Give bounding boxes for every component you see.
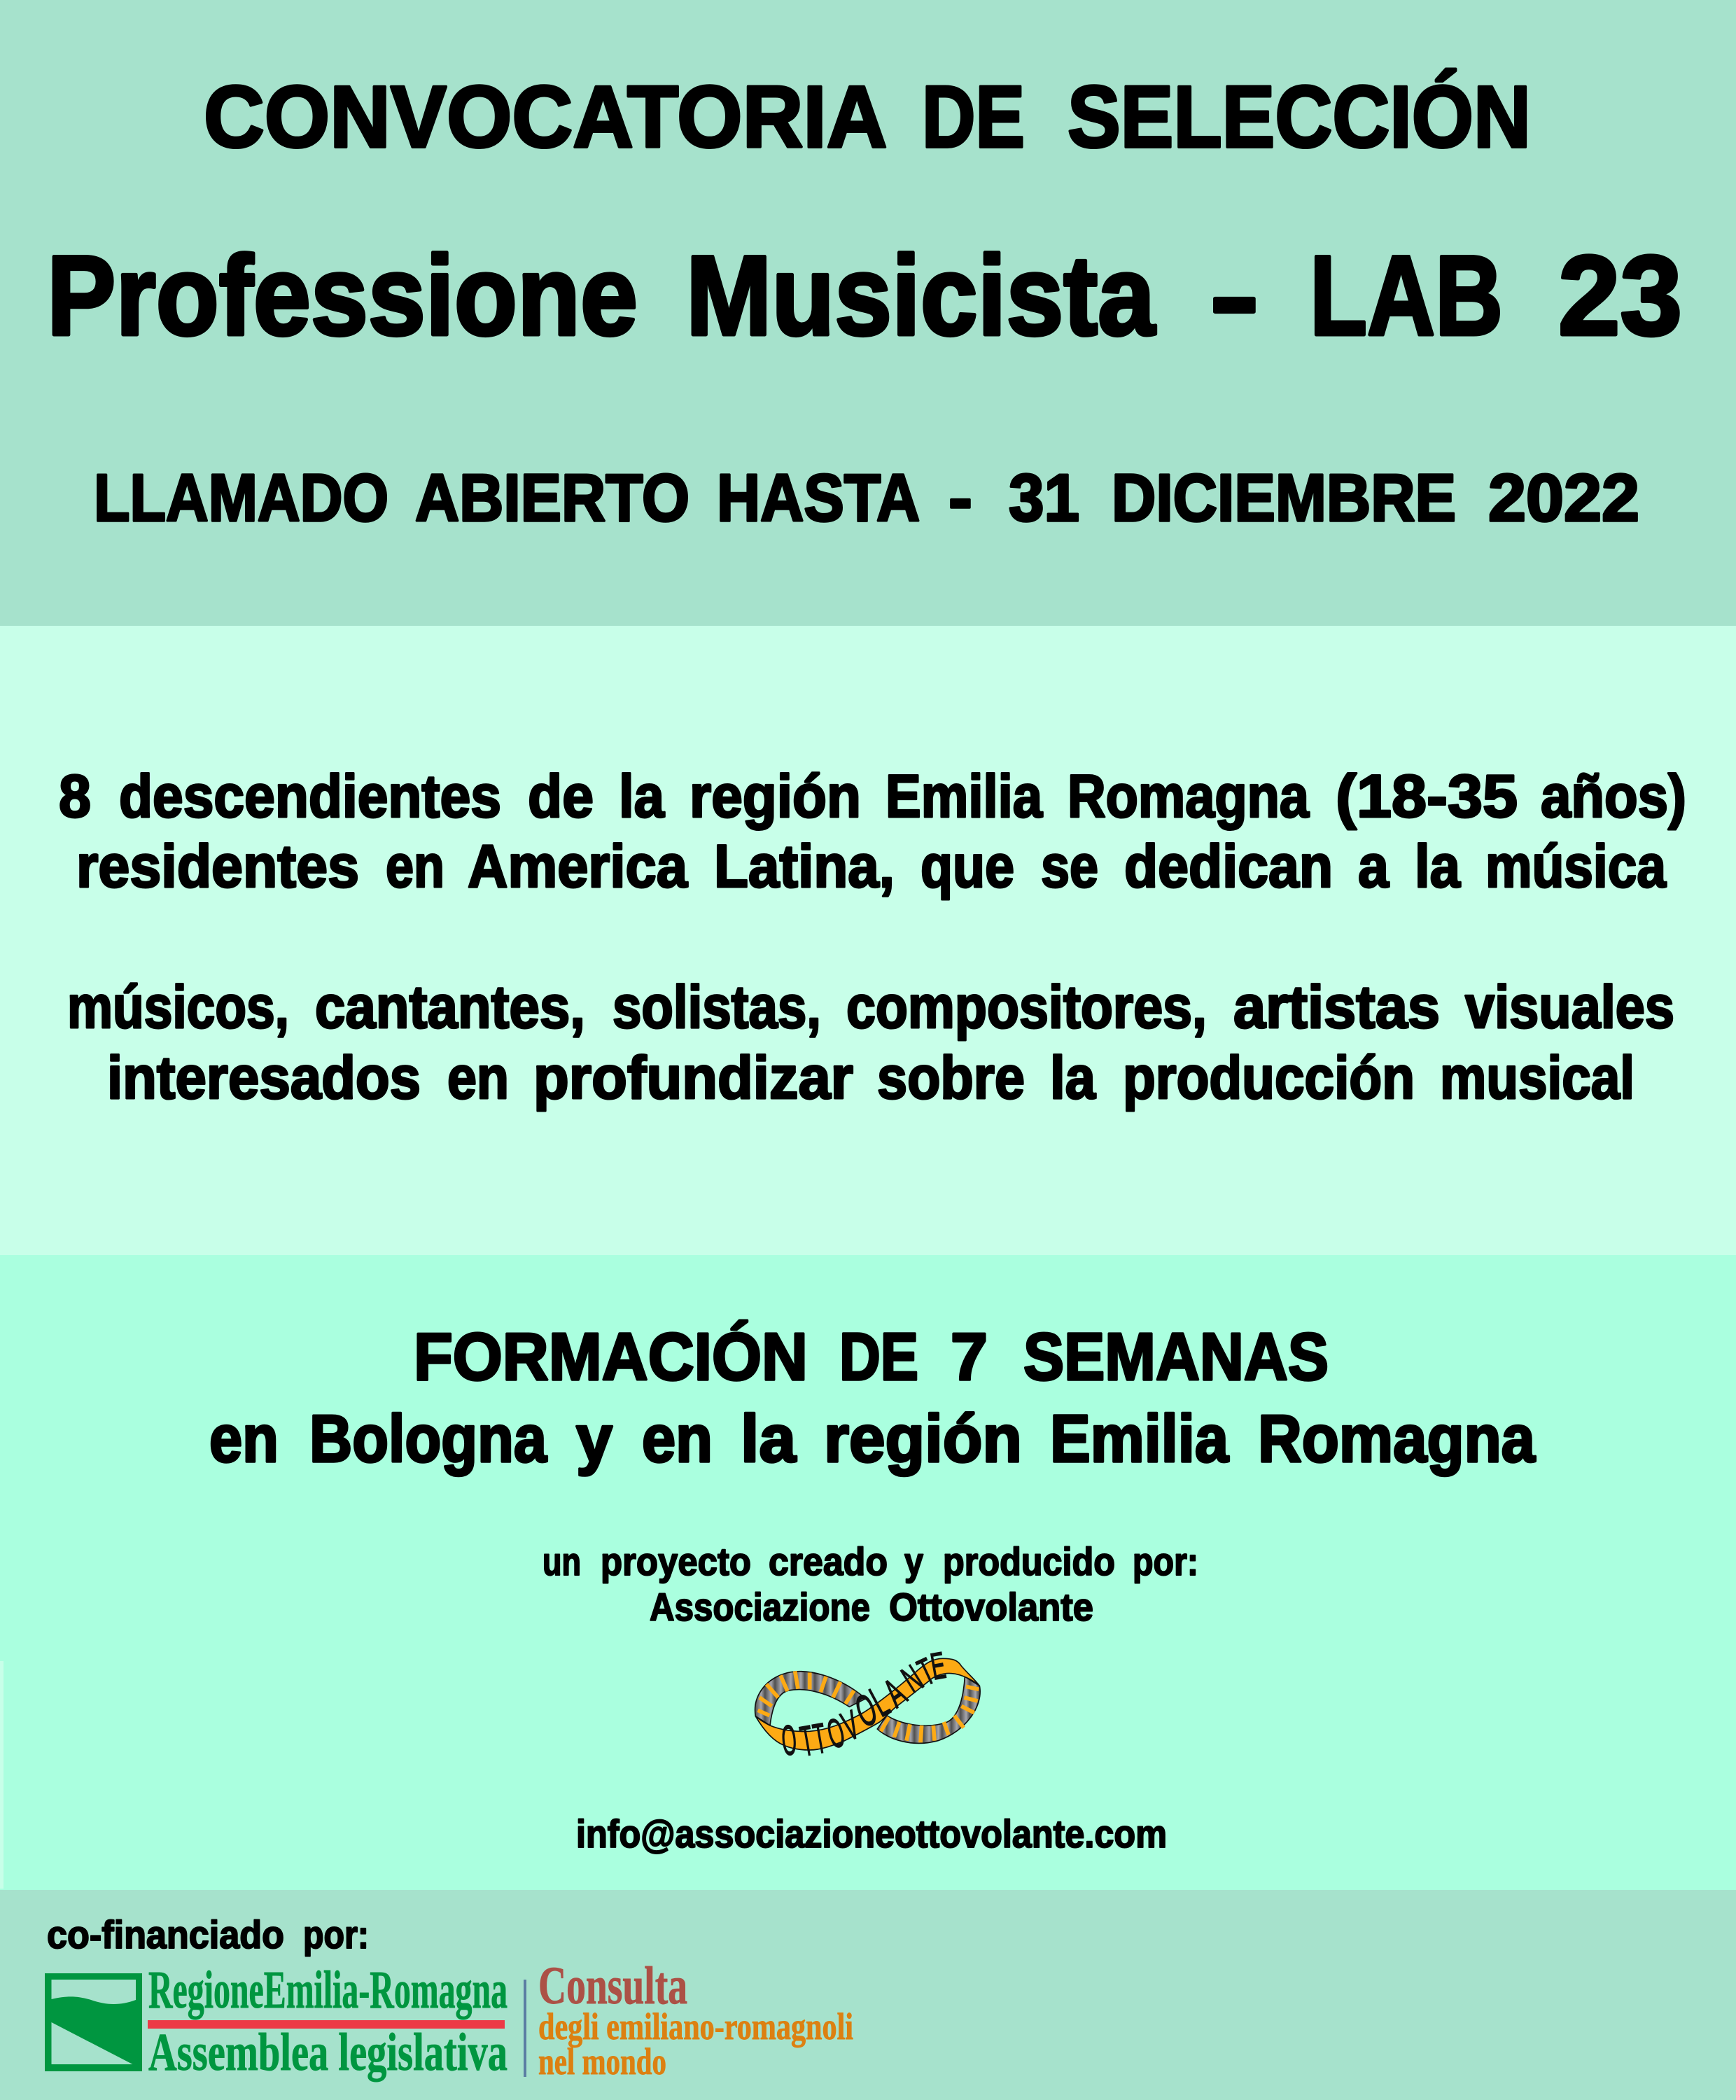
- text: profiles: visuales: [1465, 974, 1674, 1041]
- logo lettering: O: [849, 1684, 883, 1737]
- logo divider: [524, 1980, 526, 2077]
- text: who can apply: Romagna: [1068, 763, 1310, 830]
- logo: Consulta: [538, 1956, 853, 2082]
- icon: Regione Emilia-Romagna emblem: [45, 1973, 142, 2071]
- deadline: DICIEMBRE: [1112, 461, 1456, 536]
- logo lettering: A: [876, 1670, 915, 1716]
- text: profiles: compositores,: [846, 974, 1207, 1041]
- heading: training duration: Emilia: [1050, 1401, 1229, 1476]
- title: Professione Musicista: Musicista: [686, 232, 1156, 359]
- text: who can apply: residentes: [76, 833, 359, 900]
- deadline: LLAMADO: [94, 461, 388, 536]
- text: profiles: interesados: [107, 1044, 421, 1112]
- text: who can apply: descendientes: [119, 763, 501, 830]
- panel: training: [0, 1255, 1736, 1890]
- heading: training duration: SEMANAS: [1023, 1320, 1329, 1394]
- text: who can apply: Emilia: [886, 763, 1043, 830]
- logo: Assemblea legislativa: Assemblea legislativa: [148, 2023, 507, 2082]
- heading: training duration: Romagna: [1258, 1401, 1536, 1476]
- logo lettering: O: [822, 1709, 849, 1757]
- logo lettering: L: [862, 1676, 897, 1726]
- text: who can apply: [59, 763, 1686, 900]
- heading: training duration: FORMACIÓN: [414, 1320, 808, 1394]
- heading: convocatoria: DE: [922, 69, 1025, 166]
- logo: Assemblea legislativa: [148, 1961, 507, 2082]
- text: project credit: proyecto: [601, 1539, 751, 1583]
- title: Professione Musicista: 23: [1558, 232, 1682, 359]
- text: who can apply: la: [619, 763, 665, 830]
- text: who can apply: se: [1041, 833, 1098, 900]
- text: contact email: info@associazioneottovolante.com: [576, 1812, 1167, 1856]
- deadline: -: [948, 461, 972, 536]
- deadline: ABIERTO: [415, 461, 690, 536]
- text: who can apply: años): [1541, 763, 1686, 830]
- text: profiles: solistas,: [612, 974, 821, 1041]
- heading: convocatoria: SELECCIÓN: [1068, 69, 1531, 166]
- text: who can apply: dedican: [1124, 833, 1333, 900]
- text: who can apply: a: [1358, 833, 1390, 900]
- panel: funders footer: [0, 1890, 1736, 2100]
- title: Professione Musicista: Professione: [47, 232, 638, 359]
- text: profiles: artistas: [1233, 974, 1440, 1041]
- deadline: 31: [1009, 461, 1079, 536]
- panel: header: [0, 0, 1736, 626]
- logo lettering: [780, 1644, 948, 1766]
- logo: Assemblea legislativa: RegioneEmilia-Romagna: [148, 1961, 507, 2019]
- heading: training duration: y: [576, 1401, 612, 1476]
- text: project credit: un: [542, 1539, 581, 1583]
- heading: training duration: [209, 1320, 1536, 1476]
- text: project credit: Associazione: [650, 1585, 870, 1629]
- heading: training duration: DE: [839, 1320, 918, 1394]
- logo: Consulta: degli emiliano-romagnoli: [538, 2005, 853, 2047]
- logo lettering: V: [836, 1702, 864, 1749]
- text: who can apply: música: [1485, 833, 1667, 900]
- text: who can apply: Latina,: [714, 833, 895, 900]
- title: Professione Musicista: LAB: [1310, 232, 1503, 359]
- text: profiles: profundizar: [533, 1044, 853, 1112]
- logo lettering: T: [911, 1650, 941, 1694]
- text: project credit: creado: [769, 1539, 888, 1583]
- title: Professione Musicista: -: [1210, 232, 1259, 359]
- text: profiles: producción: [1123, 1044, 1415, 1112]
- logo lettering: N: [895, 1657, 930, 1701]
- deadline: HASTA: [717, 461, 918, 536]
- text: profiles: la: [1050, 1044, 1096, 1112]
- text: who can apply: 8: [59, 763, 91, 830]
- text: profiles: sobre: [877, 1044, 1025, 1112]
- heading: training duration: la: [741, 1401, 797, 1476]
- text: co-funded by: co-financiado: [47, 1912, 284, 1956]
- text: project credit: [542, 1539, 1198, 1629]
- text: project credit: y: [904, 1539, 923, 1583]
- heading: training duration: en: [209, 1401, 279, 1476]
- text: project credit: producido: [943, 1539, 1115, 1583]
- text: who can apply: que: [920, 833, 1014, 900]
- text: who can apply: America: [468, 833, 688, 900]
- heading: convocatoria: CONVOCATORIA: [204, 69, 885, 166]
- text: profiles: en: [447, 1044, 509, 1112]
- panel: description: [0, 626, 1736, 1255]
- text: project credit: Ottovolante: [889, 1585, 1093, 1629]
- text: co-funded by: por:: [303, 1912, 369, 1956]
- text: who can apply: en: [386, 833, 444, 900]
- heading: training duration: en: [642, 1401, 713, 1476]
- text: who can apply: (18-35: [1336, 763, 1518, 830]
- logo lettering: O: [780, 1716, 799, 1764]
- text: who can apply: de: [528, 763, 594, 830]
- text: project credit: por:: [1133, 1539, 1198, 1583]
- logo lettering: E: [927, 1644, 948, 1688]
- logo lettering: T: [797, 1717, 817, 1766]
- text: who can apply: región: [690, 763, 861, 830]
- text: profiles: [67, 974, 1674, 1112]
- icon: Ottovolante infinity logo: [755, 1644, 980, 1766]
- deadline: 2022: [1488, 461, 1639, 536]
- logo: Consulta: nel mondo: [538, 2040, 666, 2082]
- heading: training duration: región: [824, 1401, 1022, 1476]
- logo lettering: T: [810, 1714, 830, 1763]
- text: profiles: músicos,: [67, 974, 289, 1041]
- heading: training duration: 7: [951, 1320, 988, 1394]
- text: who can apply: la: [1415, 833, 1461, 900]
- heading: training duration: Bologna: [309, 1401, 547, 1476]
- text: profiles: musical: [1440, 1044, 1634, 1112]
- logo: Consulta: Consulta: [538, 1956, 687, 2015]
- text: profiles: cantantes,: [315, 974, 585, 1041]
